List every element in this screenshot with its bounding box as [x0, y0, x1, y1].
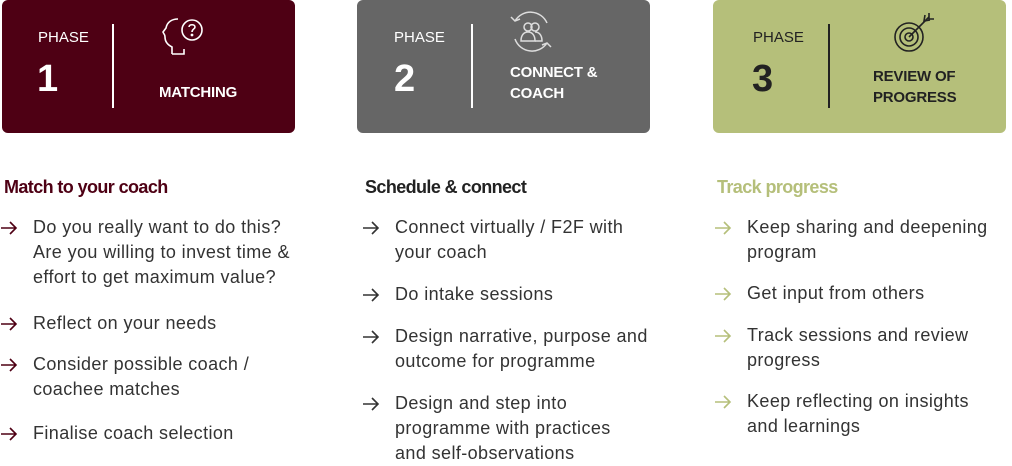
item 1: Are you willing to invest time &	[33, 242, 290, 262]
icon: target	[894, 13, 934, 52]
item 3: Consider possible coach /	[33, 354, 249, 374]
item 3	[1, 354, 249, 399]
item 4: Design and step into	[395, 393, 567, 413]
item 4: Keep reflecting on insights	[747, 391, 969, 411]
item 3	[715, 325, 968, 370]
column 2	[363, 177, 648, 463]
phase label 3: PHASE	[753, 29, 804, 46]
item 1: effort to get maximum value?	[33, 267, 276, 287]
title: connect & coach: CONNECT &	[510, 64, 597, 81]
item 3: coachee matches	[33, 379, 180, 399]
item 4	[715, 391, 969, 436]
phase label 1: PHASE	[38, 29, 89, 46]
item 1: Keep sharing and deepening	[747, 217, 988, 237]
title: review of progress	[873, 68, 956, 106]
item 1: Connect virtually / F2F with	[395, 217, 623, 237]
title: review of progress: REVIEW OF	[873, 68, 955, 85]
item 2: Get input from others	[747, 283, 924, 303]
item 3: progress	[747, 350, 820, 370]
item 1	[1, 217, 290, 287]
item 3: Design narrative, purpose and	[395, 326, 648, 346]
panel: phase 1	[2, 0, 295, 133]
item 4: Finalise coach selection	[33, 423, 234, 443]
item 1	[363, 217, 623, 262]
icon: connect cycle	[510, 11, 552, 52]
item 2: Do intake sessions	[395, 284, 553, 304]
item 4	[363, 393, 611, 463]
panel: phase 2	[357, 0, 650, 133]
number 3: 3	[752, 58, 773, 100]
panel: phase 3	[713, 0, 1006, 133]
item 3	[363, 326, 648, 371]
icon: head with question	[162, 18, 203, 55]
title: matching: MATCHING	[159, 84, 237, 101]
number 2: 2	[394, 58, 415, 100]
item 4: and self-observations	[395, 443, 574, 463]
column 1	[1, 177, 290, 443]
title: connect & coach: COACH	[510, 85, 564, 102]
heading: match to your coach: Match to your coach	[4, 177, 168, 197]
title: review of progress: PROGRESS	[873, 89, 956, 106]
item 4: programme with practices	[395, 418, 611, 438]
item 3: Track sessions and review	[747, 325, 968, 345]
item 1: Do you really want to do this?	[33, 217, 281, 237]
item 4: and learnings	[747, 416, 860, 436]
column 3	[715, 177, 988, 436]
item 2: Reflect on your needs	[33, 313, 217, 333]
item 1: your coach	[395, 242, 487, 262]
title: connect & coach	[510, 64, 598, 102]
phase label 2: PHASE	[394, 29, 445, 46]
item 3: outcome for programme	[395, 351, 595, 371]
item 1	[715, 217, 988, 262]
number 1: 1	[37, 58, 58, 100]
heading: track progress: Track progress	[717, 177, 838, 197]
heading: schedule & connect: Schedule & connect	[365, 177, 526, 197]
item 1: program	[747, 242, 817, 262]
